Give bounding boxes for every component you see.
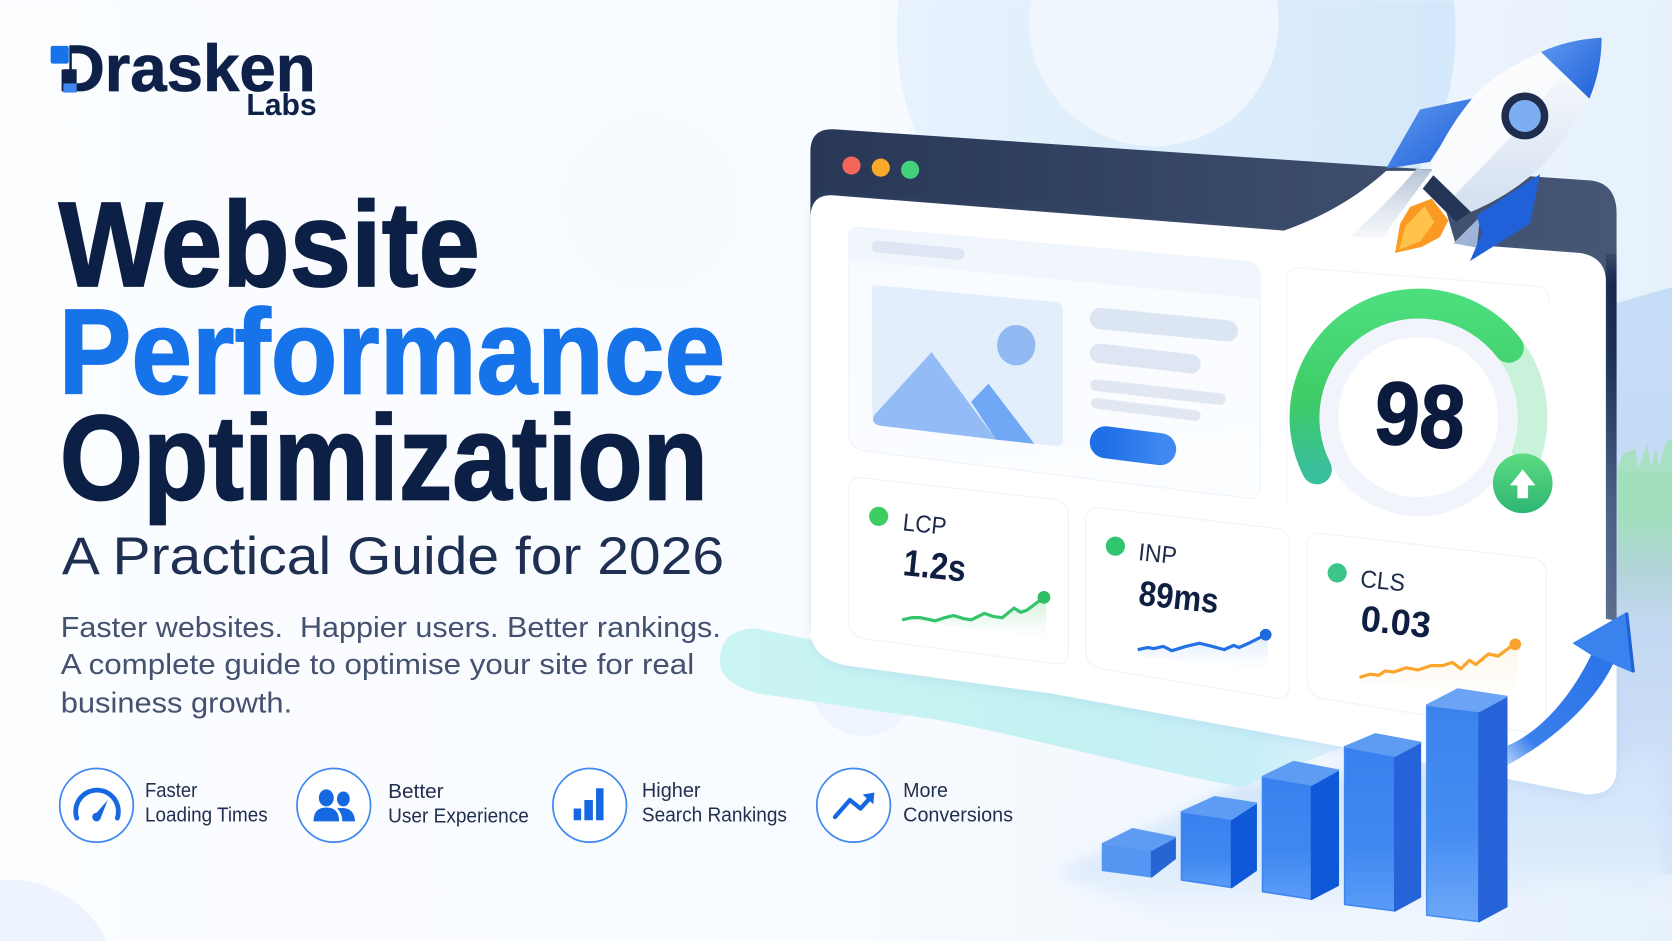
rocket body [1431,52,1589,212]
label [642,780,787,826]
label: Conversions [903,804,1013,826]
bar 5 [1427,689,1507,922]
bar 2 [1181,797,1256,887]
label [903,780,1013,826]
feature: more conversions [817,769,1013,842]
card: INP [1086,508,1289,698]
wordmark: Drasken [58,32,316,106]
porthole [1501,92,1548,139]
icon: users [297,769,371,842]
title line 3: Optimization [60,390,708,525]
title line 2: Performance [59,285,725,420]
subtitle: A Practical Guide for 2026 [62,527,724,586]
bar 1 [1103,829,1175,877]
gauge score [1304,304,1553,516]
fin right [1470,174,1540,261]
card: CLS [1307,533,1546,733]
rocket [1386,38,1602,261]
card: CLS: 0.03 [1359,598,1433,646]
score number: 98 [1371,362,1469,468]
label: User Experience [388,805,529,827]
icon: bars [553,769,626,842]
icon: trend arrow [817,769,890,842]
description: Faster websites. Happier users. Better rankings. [61,612,721,644]
feature: higher search rankings [553,769,787,842]
title pill [878,247,959,254]
card: INP: INP [1137,539,1178,570]
card: INP: 89ms [1137,574,1221,621]
label: More [903,780,948,802]
image placeholder [872,285,1063,446]
label [388,781,529,827]
rocket shading [1453,77,1589,212]
gauge panel outline [1287,268,1549,501]
description: A complete guide to optimise your site for real [61,649,694,681]
label: Better [388,781,444,803]
up badge [1493,453,1553,513]
description [61,612,721,720]
description: business growth. [61,688,292,720]
logo mark [49,41,77,93]
browser frame [810,129,1617,629]
flame [1395,199,1448,253]
text lines [1096,319,1227,416]
rocket exhaust swoosh [1284,169,1480,267]
CLS sparkline [1360,638,1521,693]
cyan band shadow [720,628,1344,787]
nozzle [1423,175,1471,222]
label: Faster [145,780,198,802]
label: Search Rankings [642,804,787,826]
bar 3 [1263,762,1338,899]
label: Higher [642,780,701,802]
card: LCP [849,478,1068,664]
button [1106,442,1160,449]
grass behind window [1618,440,1672,627]
feature: faster loading times [60,769,268,842]
label: Loading Times [145,804,268,826]
growth arrow [1508,613,1633,765]
card: CLS: CLS [1359,566,1406,597]
fin left [1386,99,1472,169]
title line 1: Website [59,177,480,312]
card: LCP: 1.2s [901,541,968,590]
title [59,177,725,525]
icon: speedometer [60,769,133,842]
page mock panel [849,227,1260,498]
INP sparkline [1138,629,1272,670]
card: LCP: LCP [901,509,948,541]
feature: better user experience [297,769,529,842]
sub wordmark: Labs [246,87,317,122]
window dots [842,156,919,179]
nose cone [1541,38,1602,99]
label [145,780,268,826]
frame right edge [1606,254,1617,624]
browser body [810,195,1617,794]
logo [49,32,317,122]
bar 4 [1345,734,1420,911]
LCP sparkline [902,591,1050,638]
bar chart [1103,613,1633,922]
